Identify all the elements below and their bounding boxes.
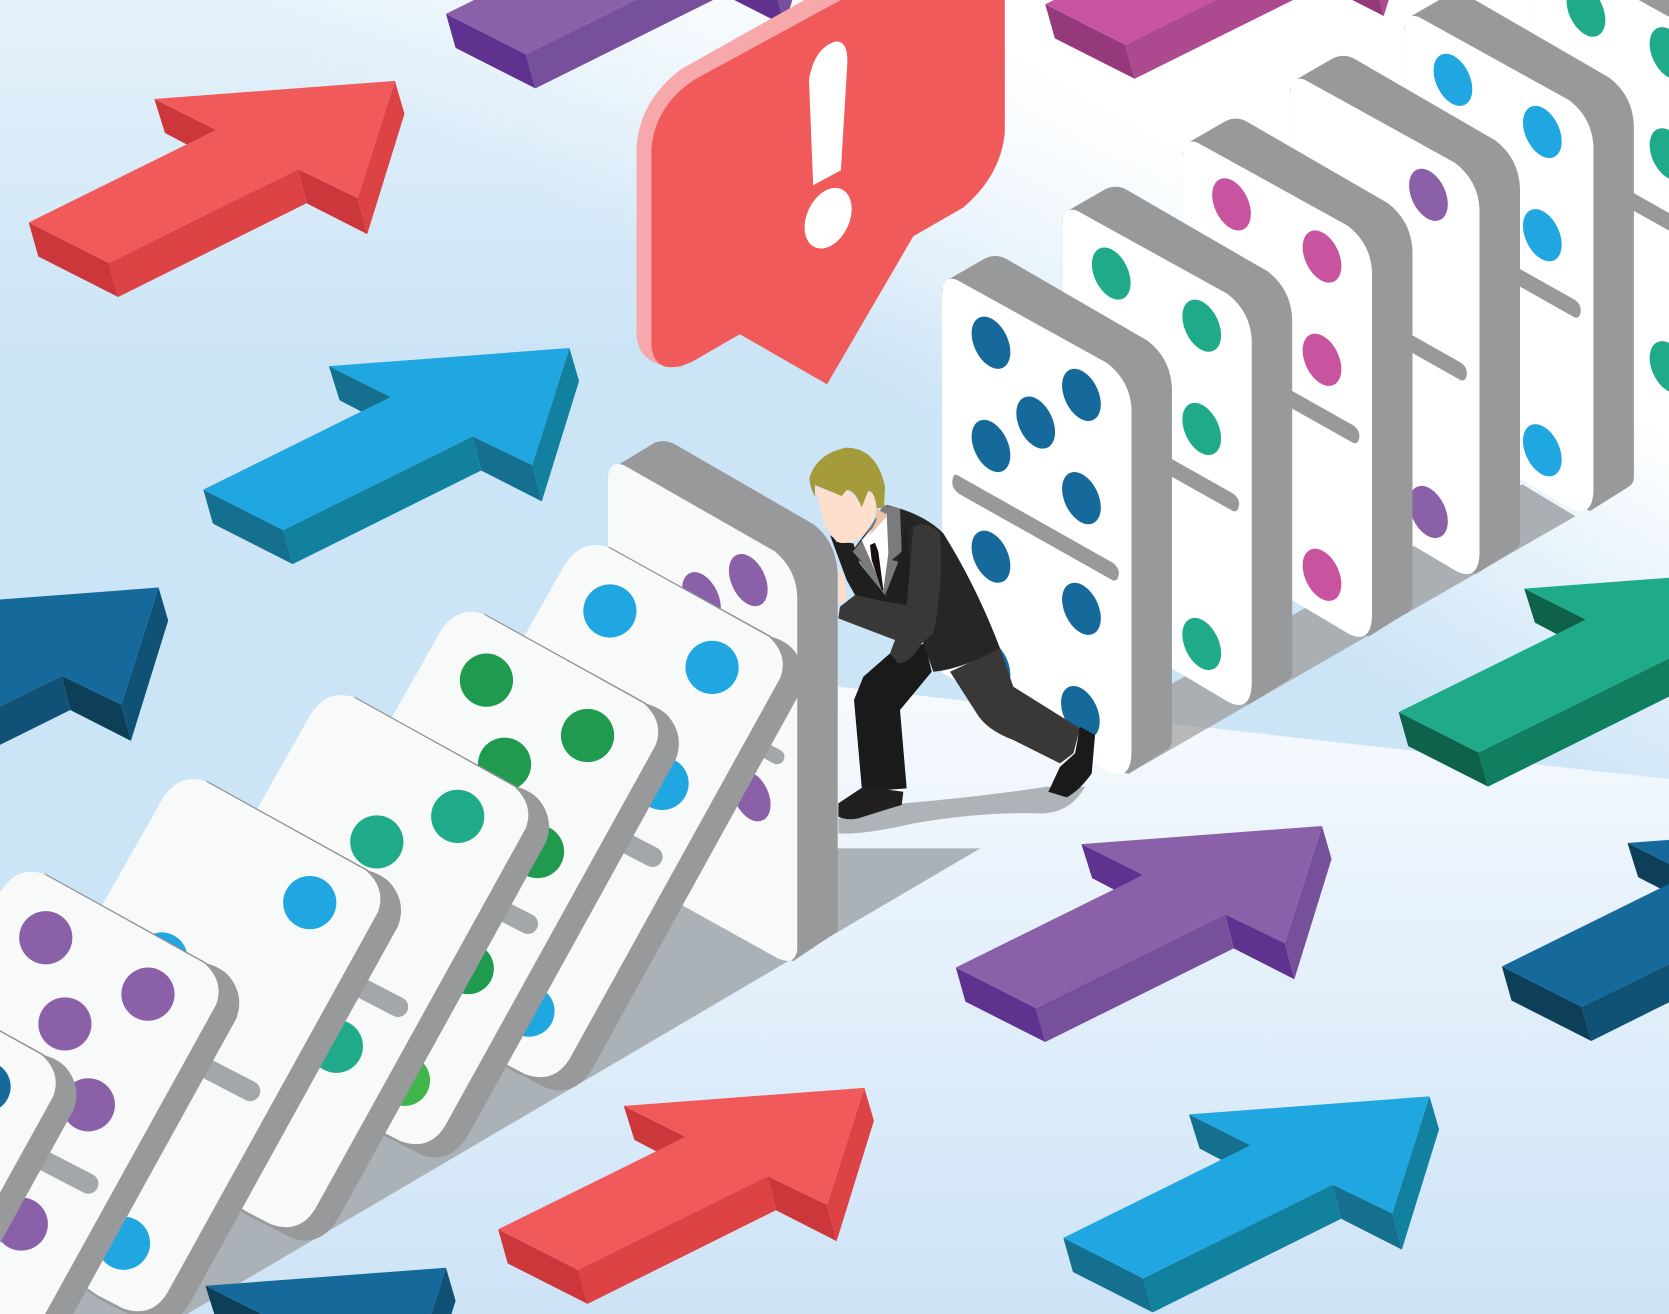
- arrow: blue bottom: [1063, 1096, 1439, 1312]
- domino: tilted six: [0, 963, 76, 1314]
- domino: being held upright: [608, 441, 838, 961]
- hand: [838, 567, 847, 605]
- domino: tilted two: [301, 612, 679, 1158]
- arrow: dark blue bottom: [80, 1268, 456, 1314]
- far arm: [830, 520, 913, 620]
- icon: alert speech bubble: [637, 0, 1005, 384]
- sleeve: [838, 524, 941, 663]
- icon: exclamation mark: [795, 41, 861, 256]
- figure shadow: [838, 787, 1085, 834]
- tie: [870, 543, 883, 590]
- arrow: magenta top: [1045, 0, 1421, 79]
- domino: row three: [1183, 119, 1412, 637]
- shadow: fallen dominoes: [0, 848, 980, 1314]
- neck: [868, 508, 887, 537]
- hair: [809, 448, 885, 508]
- arrow: blue upper left: [203, 348, 579, 564]
- domino: row four: [1290, 56, 1520, 574]
- jacket: [852, 505, 1000, 672]
- arrow: dark blue right: [1502, 825, 1669, 1041]
- domino: tilted four: [23, 779, 401, 1314]
- arrow: red bottom: [498, 1088, 874, 1304]
- shirt: [862, 513, 888, 590]
- figure: businessman pushing domino: [809, 448, 1095, 834]
- arrow: dark blue left: [0, 588, 168, 804]
- arrow: purple middle: [956, 826, 1332, 1042]
- domino: front of standing row: [942, 256, 1172, 774]
- domino: tilted five: [0, 872, 239, 1314]
- domino: row two: [1062, 187, 1292, 705]
- domino: row five: [1404, 0, 1634, 511]
- arrow: red top left: [29, 81, 404, 297]
- arrow: green right: [1399, 571, 1669, 787]
- arrow: purple top: [446, 0, 822, 88]
- shadow: standing domino row: [1064, 484, 1575, 774]
- back leg: [950, 648, 1080, 763]
- front shoe: [838, 787, 903, 819]
- back shoe: [1048, 727, 1095, 797]
- lapel: [853, 505, 902, 595]
- domino: tilted one: [426, 545, 803, 1091]
- front leg: [854, 643, 932, 792]
- domino: tilted three: [171, 695, 549, 1241]
- domino: far right: [1530, 0, 1669, 442]
- face: [815, 487, 877, 543]
